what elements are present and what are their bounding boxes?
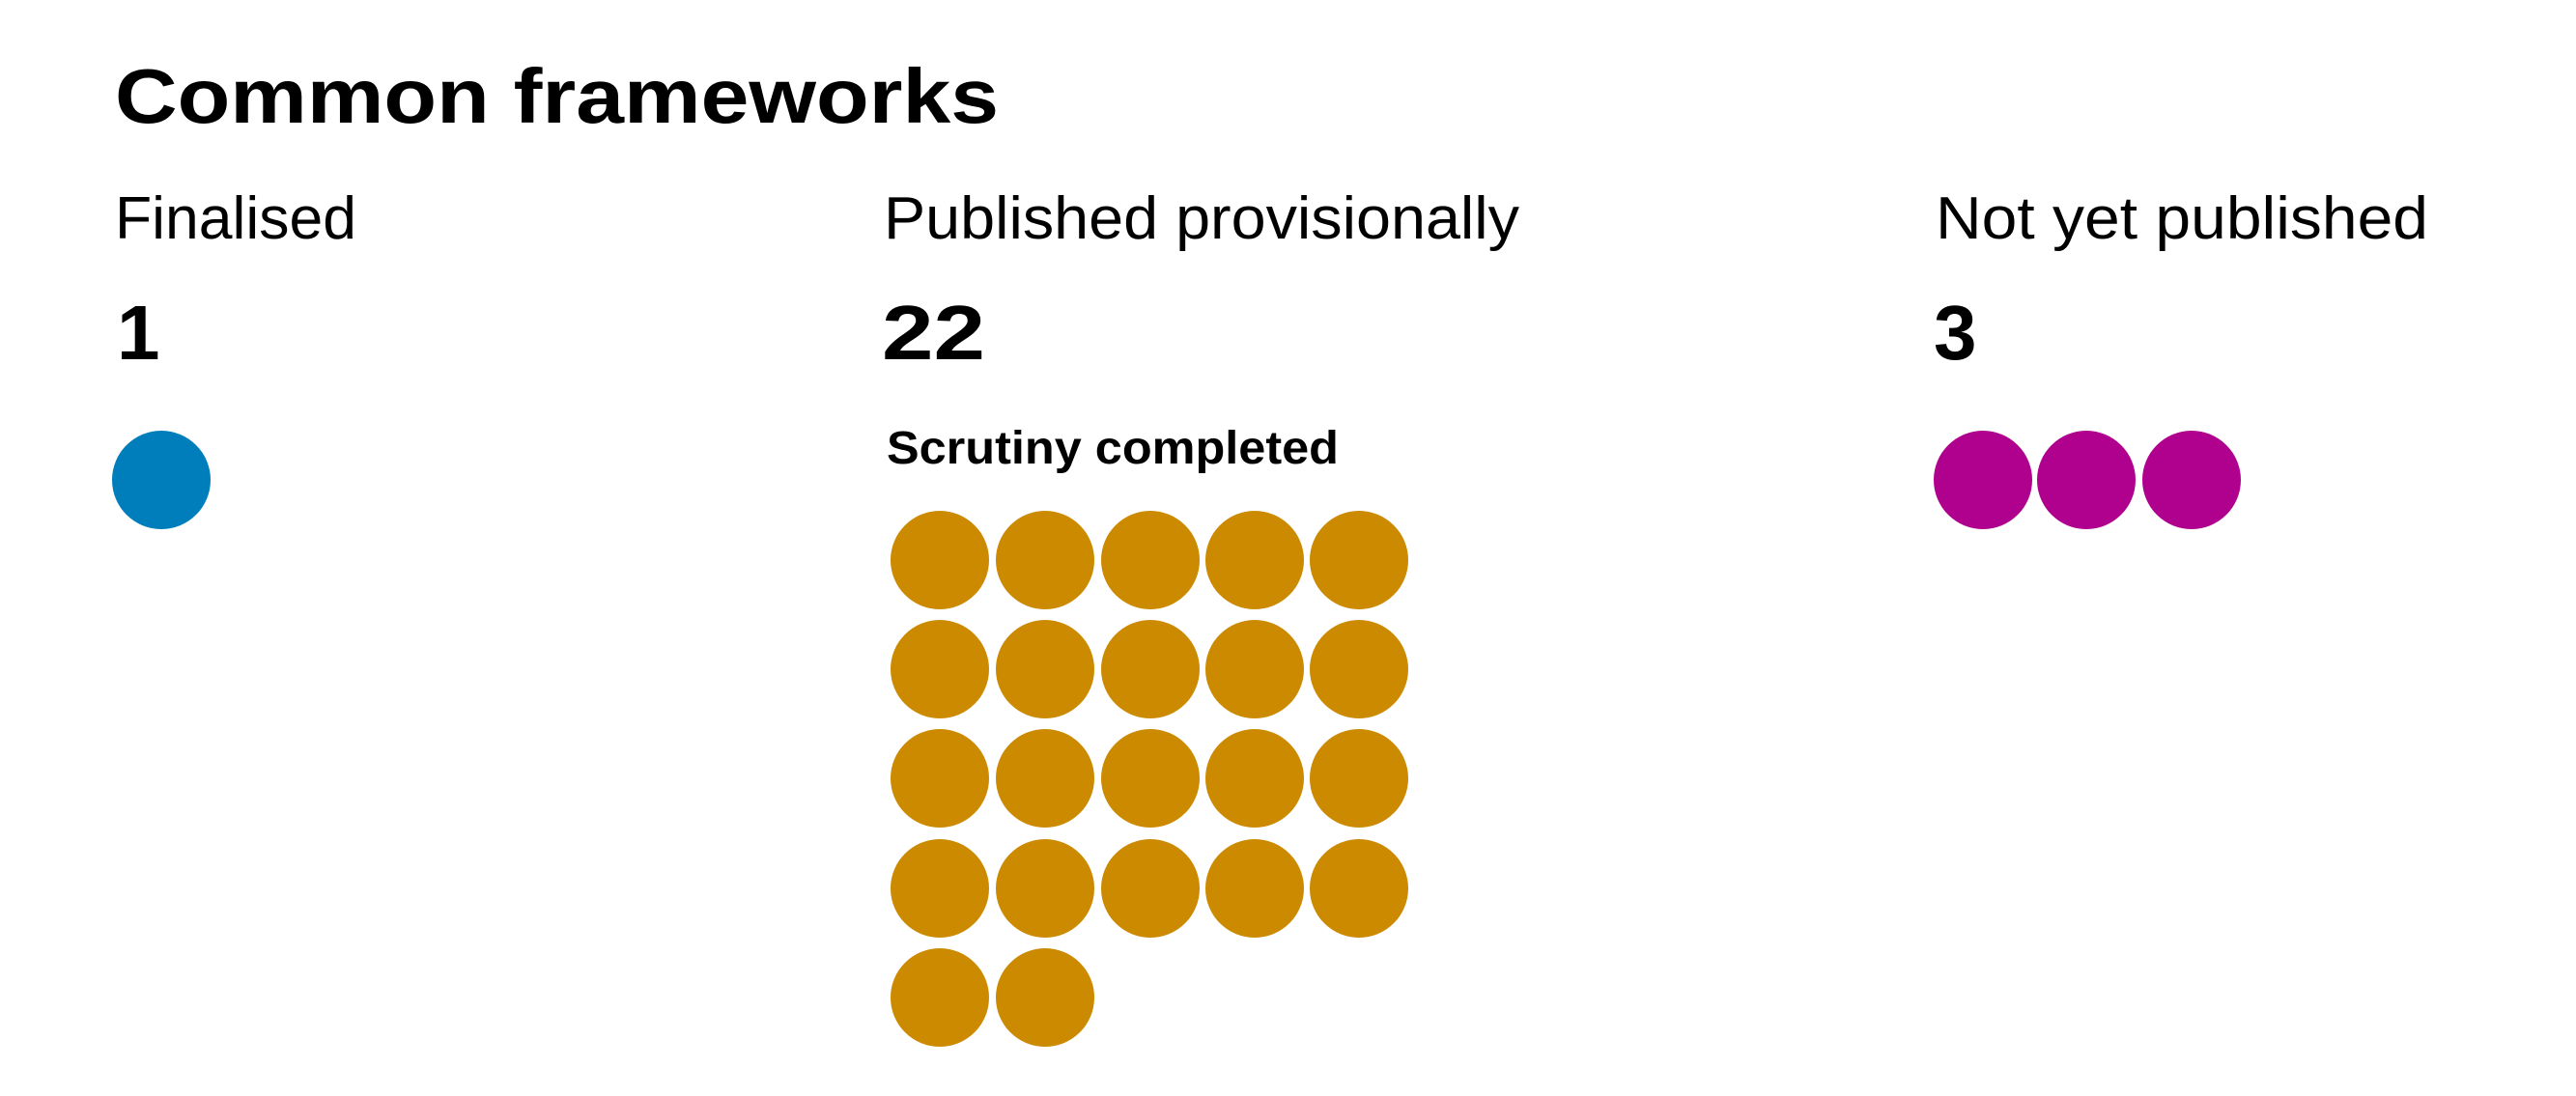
panel: not yet published bbox=[1934, 185, 2428, 529]
number: not yet published count: 3 bbox=[1934, 290, 1976, 376]
label: not yet published: Not yet published bbox=[1936, 185, 2428, 252]
number: provisional count: 22 bbox=[882, 290, 985, 376]
label: finalised: Finalised bbox=[115, 185, 356, 252]
dot grid: 22 gold dots bbox=[891, 511, 1408, 1047]
panel: published provisionally bbox=[882, 185, 1519, 1047]
dots: purple bbox=[1934, 431, 2241, 529]
title: Common frameworks bbox=[115, 53, 999, 139]
subheading: scrutiny completed: Scrutiny completed bbox=[887, 423, 1339, 474]
icon: blue dot bbox=[112, 431, 211, 529]
label: published provisionally: Published provisionally bbox=[884, 185, 1519, 252]
number: finalised count: 1 bbox=[117, 290, 160, 376]
panel: finalised bbox=[112, 185, 356, 529]
